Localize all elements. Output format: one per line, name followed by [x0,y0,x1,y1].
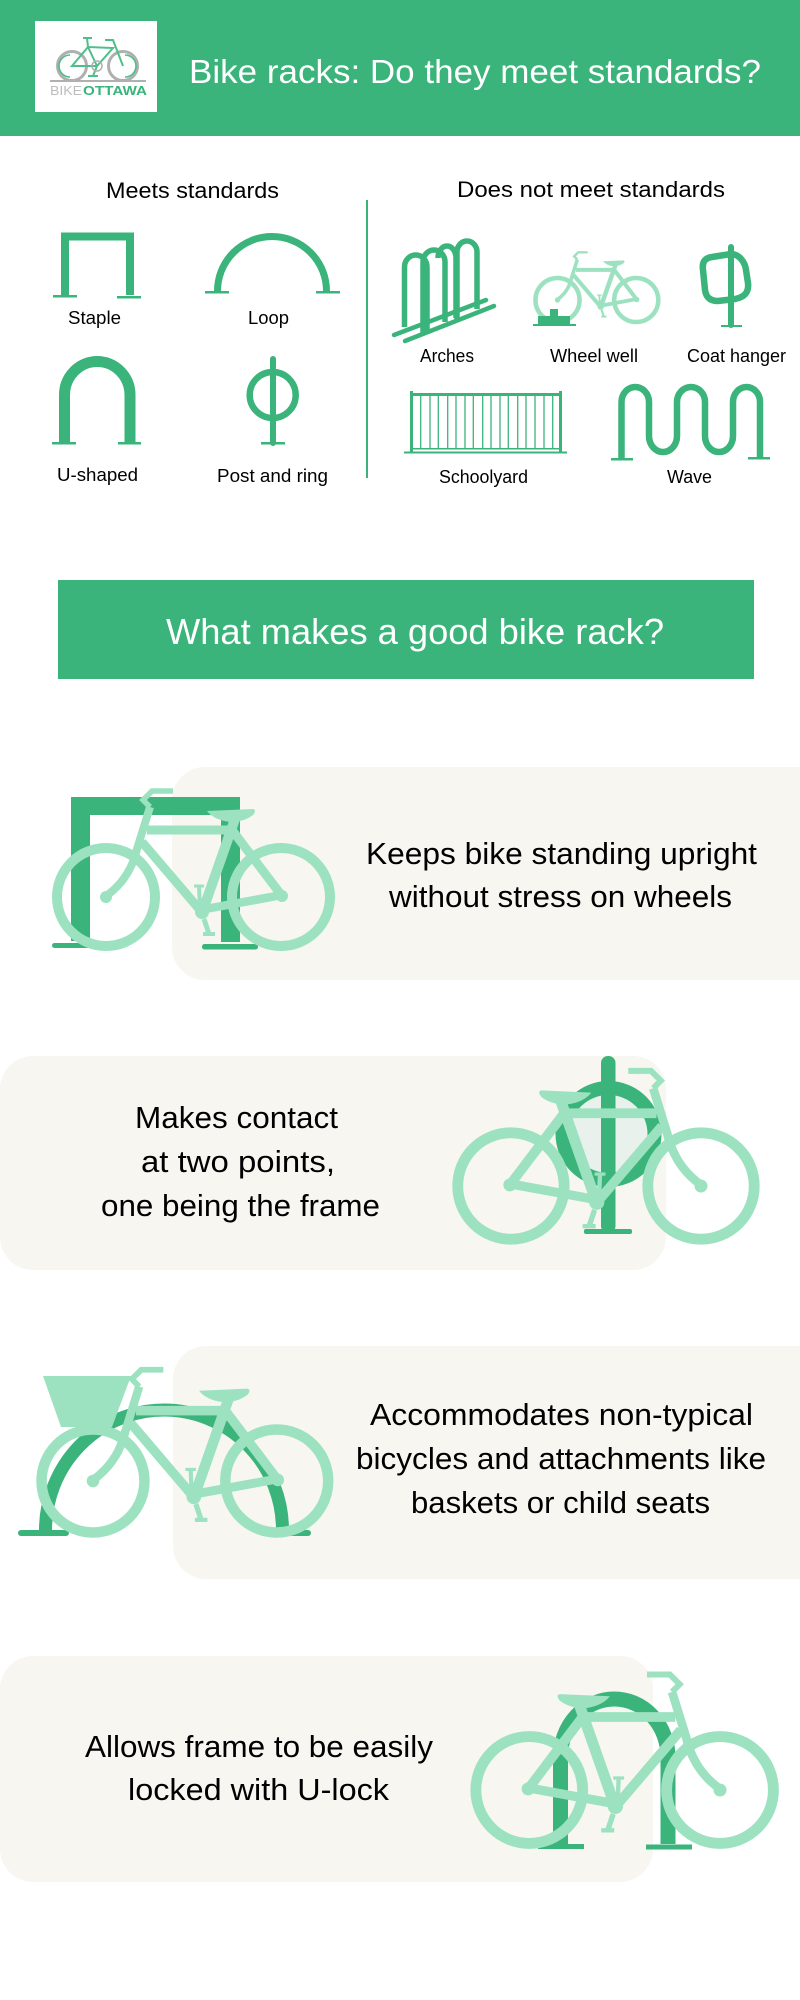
heading: meets standards: Meets standards [106,178,279,203]
logo: Bike Ottawa [35,21,157,112]
logo: Bike Ottawa: BIKE [50,83,82,98]
bike illustration [458,1071,754,1239]
panel text: at two points, [141,1144,335,1179]
label: arches: Arches [420,345,474,366]
label: staple: Staple [68,307,121,328]
staple rack illustration [52,797,258,950]
icon: schoolyard rack [404,391,567,454]
label: schoolyard: Schoolyard [439,466,528,487]
icon: loop rack [205,236,340,294]
U-shaped rack illustration [538,1699,692,1850]
post and ring illustration [562,1056,654,1234]
label: coat hanger: Coat hanger [687,345,786,366]
icon: wave rack [611,387,770,460]
panel text: Accommodates non-typical [370,1397,753,1432]
basket [43,1376,131,1427]
panel text: bicycles and attachments like [356,1441,766,1476]
icon: U-shaped rack [52,361,141,444]
panel text: Allows frame to be easily [85,1729,433,1764]
panel text: Makes contact [135,1100,338,1135]
label: wheel well: Wheel well [550,345,638,366]
label: post and ring: Post and ring [217,465,328,486]
panel text: locked with U-lock [128,1772,390,1807]
icon: coat hanger rack [703,247,748,327]
bike illustration [57,791,330,946]
banner: what makes a good bike rack: What makes a good bike rack? [166,611,664,652]
icon: post and ring rack [250,359,296,444]
icon: wheel well rack with bike [533,252,658,326]
header banner [0,0,800,136]
panel text [356,1397,766,1520]
heading: does not meet standards: Does not meet standards [457,177,725,202]
bike illustration [42,1370,328,1532]
icon: staple rack [53,236,141,298]
banner: what makes a good bike rack [58,580,754,679]
panel text [366,836,757,914]
panel text [85,1729,433,1807]
label: wave: Wave [667,466,712,487]
panel text [101,1100,380,1223]
panel text: one being the frame [101,1188,380,1223]
label: U-shaped: U-shaped [57,464,138,485]
bike illustration [476,1674,773,1843]
icon: arches rack [394,241,494,341]
logo: Bike Ottawa: OTTAWA [83,83,148,98]
panel: keeps bike upright [52,767,800,980]
label: loop: Loop [248,307,289,328]
panel text: Keeps bike standing upright [366,836,757,871]
panel text: baskets or child seats [411,1485,710,1520]
title: Bike racks: Do they meet standards? [189,53,761,90]
panel: two points of contact [0,1056,754,1270]
loop rack illustration [18,1410,311,1536]
panel: accommodates non-typical bicycles [18,1346,800,1579]
panel text: without stress on wheels [388,879,732,914]
panel: U-lock [0,1656,773,1882]
